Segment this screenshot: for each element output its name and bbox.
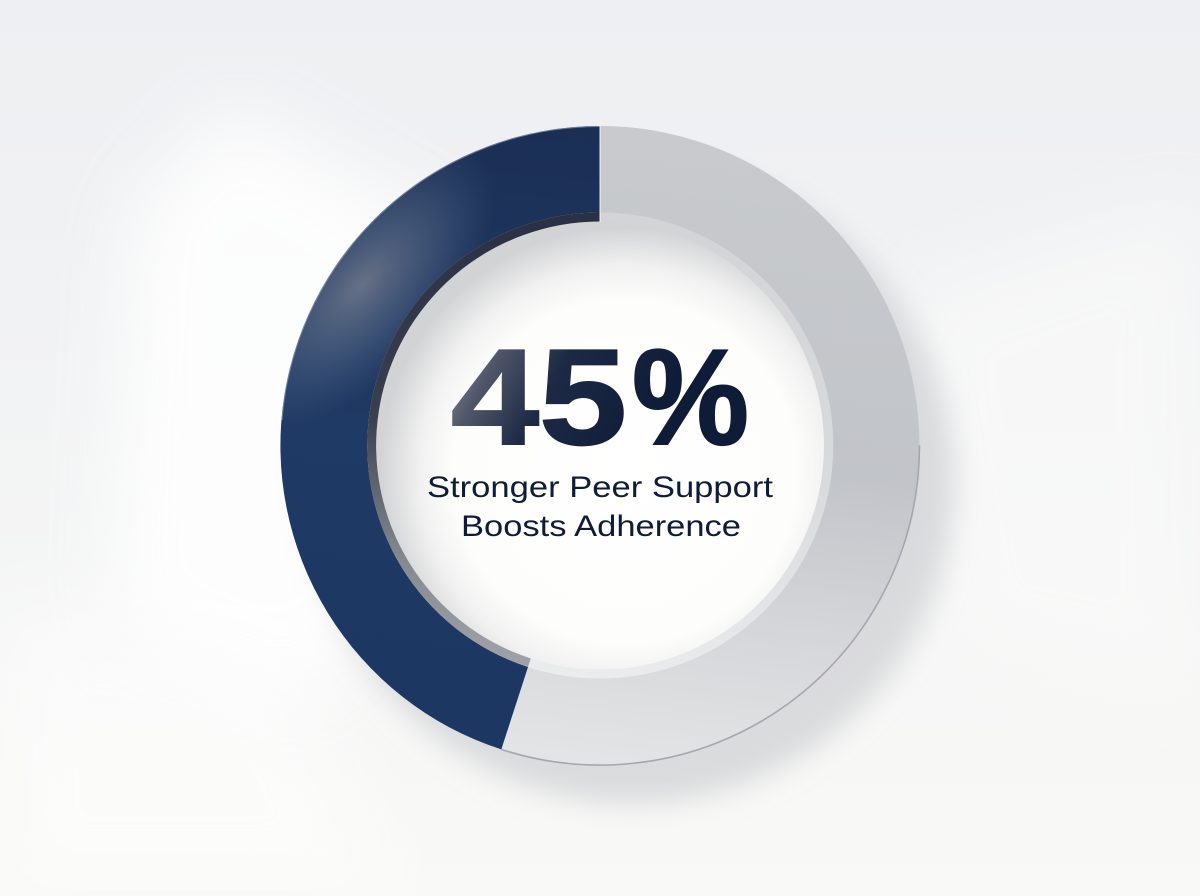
ring drop shadow: [310, 160, 954, 804]
caption: Boosts Adherence: [461, 510, 741, 543]
big number: 45: [451, 321, 627, 473]
donut chart: 45 percent: [280, 126, 919, 765]
center disk: [376, 222, 824, 670]
caption: Stronger Peer Support: [427, 471, 773, 504]
segment: 45 percent (navy): [280, 126, 600, 749]
segment: remaining 55 percent (gray): [501, 126, 920, 765]
inner bevel of gray segment: [367, 212, 833, 678]
big number: %: [632, 321, 749, 473]
segment divider: [599, 126, 601, 222]
caption: [427, 471, 773, 543]
